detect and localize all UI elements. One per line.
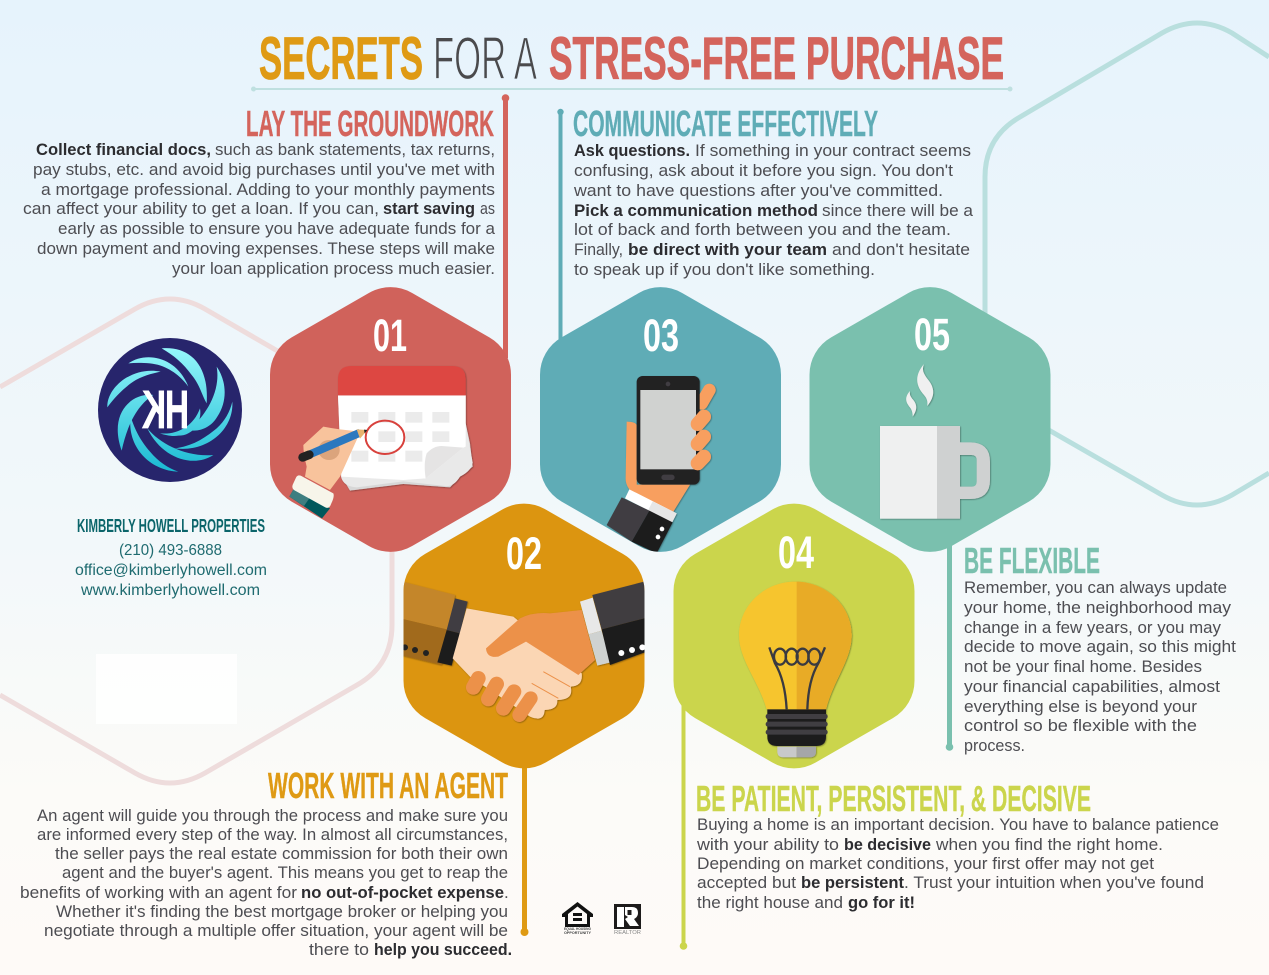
background hexagon outline: right: [985, 23, 1269, 505]
title: FOR A: [433, 25, 537, 92]
connector: step 4: [680, 700, 687, 950]
title: SECRETS: [259, 25, 423, 92]
text block: be flexible: change in a few years, or you may: [964, 618, 1221, 637]
title: [259, 25, 1004, 92]
text block: be flexible: Remember, you can always update: [964, 578, 1227, 597]
text block: communicate effectively: Ask questions.: [574, 141, 690, 160]
text block: communicate effectively: since there will be a: [822, 201, 974, 220]
text block: be patient, persistent, decisive: be persistent: [801, 873, 904, 892]
contact details: KIMBERLY HOWELL PROPERTIES: [77, 516, 265, 536]
logo: Kimberly Howell swirl: K: [142, 380, 166, 440]
panel: step 4 hexagon: [673, 504, 915, 768]
text block: lay the groundwork: can affect your ability to get a loan. If you can,: [23, 199, 379, 218]
text block: lay the groundwork: pay stubs, etc. and avoid big purchases until you've met with: [33, 160, 495, 179]
text block: be flexible: [964, 578, 1236, 755]
connector: step 3: [557, 109, 564, 342]
text block: work with an agent: benefits of working with an agent for: [20, 883, 297, 902]
text block: be flexible: process.: [964, 736, 1025, 755]
text block: communicate effectively: and don't hesitate: [832, 240, 970, 259]
text block: communicate effectively: Pick a communication method: [574, 201, 818, 220]
text block: be flexible: not be your final home. Besides: [964, 657, 1202, 676]
heading: work with an agent: WORK WITH AN AGENT: [268, 765, 508, 806]
icon: realtor mark: [614, 904, 641, 936]
number 04: 04: [778, 527, 814, 578]
text block: work with an agent: there to: [309, 940, 369, 959]
panel: step 2 hexagon: [400, 504, 647, 768]
text block: communicate effectively: [573, 141, 974, 279]
icon: coffee mug: [880, 364, 990, 519]
contact details: office@kimberlyhowell.com: [75, 562, 267, 579]
text block: lay the groundwork: [23, 140, 496, 278]
text block: lay the groundwork: a mortgage professional. Adding to your monthly payments: [41, 180, 495, 199]
contact details: www.kimberlyhowell.com: [80, 582, 260, 599]
connector: step 5: [946, 545, 953, 751]
text block: be patient, persistent, decisive: go for it!: [848, 893, 915, 912]
text block: be patient, persistent, decisive: [696, 815, 1219, 912]
panel: step 5 hexagon: [809, 287, 1051, 552]
text block: be flexible: control so be flexible with the: [964, 716, 1197, 735]
text block: lay the groundwork: as: [480, 199, 495, 218]
text block: work with an agent: are informed every step of the way. In almost all circumstances,: [37, 825, 508, 844]
text block: be patient, persistent, decisive: the right house and: [697, 893, 843, 912]
text block: communicate effectively: Finally,: [574, 240, 623, 259]
text block: be patient, persistent, decisive: when you find the right home.: [935, 835, 1163, 854]
text block: work with an agent: the seller pays the real estate commission for both their own: [55, 844, 508, 863]
logo: Kimberly Howell swirl: [98, 338, 242, 482]
number 03: 03: [643, 310, 679, 361]
text block: be flexible: everything else is beyond your: [964, 697, 1197, 716]
icon: smartphone in hand: [607, 376, 709, 553]
icon: equal housing opportunity: OPPORTUNITY: [564, 931, 592, 935]
text block: work with an agent: help you succeed.: [374, 940, 512, 959]
heading: lay the groundwork: LAY THE GROUNDWORK: [246, 103, 494, 144]
text block: communicate effectively: lot of back and forth between you and the team.: [574, 220, 951, 239]
background hexagon outline: left: [0, 299, 392, 783]
text block: lay the groundwork: your loan application process much easier.: [172, 259, 495, 278]
text block: communicate effectively: If something in your contract seems: [695, 141, 971, 160]
contact details: (210) 493-6888: [119, 542, 222, 559]
blank white box: [96, 654, 237, 724]
heading: be flexible: BE FLEXIBLE: [964, 540, 1100, 581]
text block: work with an agent: An agent will guide you through the process and make sure you: [37, 806, 508, 825]
panel: step 1 hexagon: [270, 287, 511, 552]
text block: be patient, persistent, decisive: Buying a home is an important decision. You have to balance patience: [697, 815, 1219, 834]
text block: work with an agent: agent and the buyer's agent. This means you get to reap the: [62, 863, 508, 882]
number 05: 05: [914, 309, 950, 360]
text block: lay the groundwork: down payment and moving expenses. These steps will make: [37, 239, 495, 258]
icon: handshake: [400, 581, 647, 719]
text block: be patient, persistent, decisive: with your ability to: [696, 835, 839, 854]
icon: light bulb: [739, 582, 852, 757]
connector: step 2: [520, 760, 528, 936]
text block: be flexible: your financial capabilities, almost: [964, 677, 1220, 696]
text block: communicate effectively: want to have questions after you've committed.: [573, 181, 943, 200]
text block: work with an agent: .: [504, 883, 509, 902]
text block: communicate effectively: be direct with your team: [628, 240, 827, 259]
connector: step 1: [502, 94, 509, 358]
icon: realtor mark: REALTOR: [614, 930, 641, 936]
text block: lay the groundwork: such as bank statements, tax returns,: [215, 140, 495, 159]
icon: calendar and hand: [289, 366, 473, 518]
contact details: [75, 516, 267, 599]
icon: equal housing opportunity: EQUAL HOUSING: [564, 927, 591, 931]
text block: be patient, persistent, decisive: accepted but: [697, 873, 796, 892]
text block: be patient, persistent, decisive: Depending on market conditions, your first offer may not get: [697, 854, 1154, 873]
text block: work with an agent: no out-of-pocket expense: [301, 883, 504, 902]
text block: communicate effectively: confusing, ask about it before you sign. You don't: [574, 161, 953, 180]
number 02: 02: [506, 528, 542, 579]
number 01: 01: [373, 310, 407, 361]
logo: Kimberly Howell swirl: H: [165, 380, 189, 440]
text block: work with an agent: Whether it's finding the best mortgage broker or helping you: [56, 902, 508, 921]
panel: step 3 hexagon: [540, 287, 781, 553]
text block: be patient, persistent, decisive: be decisive: [844, 835, 931, 854]
text block: be patient, persistent, decisive: . Trust your intuition when you've found: [904, 873, 1204, 892]
text block: work with an agent: negotiate through a multiple offer situation, your agent will be: [44, 921, 508, 940]
text block: work with an agent: [20, 806, 512, 959]
text block: be flexible: your home, the neighborhood may: [964, 598, 1232, 617]
heading: communicate effectively: COMMUNICATE EFFECTIVELY: [573, 103, 878, 144]
text block: communicate effectively: to speak up if you don't like something.: [574, 260, 875, 279]
text block: lay the groundwork: Collect financial docs,: [36, 140, 211, 159]
title underline: [251, 86, 1012, 92]
text block: lay the groundwork: start saving: [383, 199, 475, 218]
icon: equal housing opportunity: [562, 902, 593, 935]
text block: lay the groundwork: early as possible to ensure you have adequate funds for a: [58, 219, 496, 238]
text block: be flexible: decide to move again, so this might: [964, 637, 1236, 656]
